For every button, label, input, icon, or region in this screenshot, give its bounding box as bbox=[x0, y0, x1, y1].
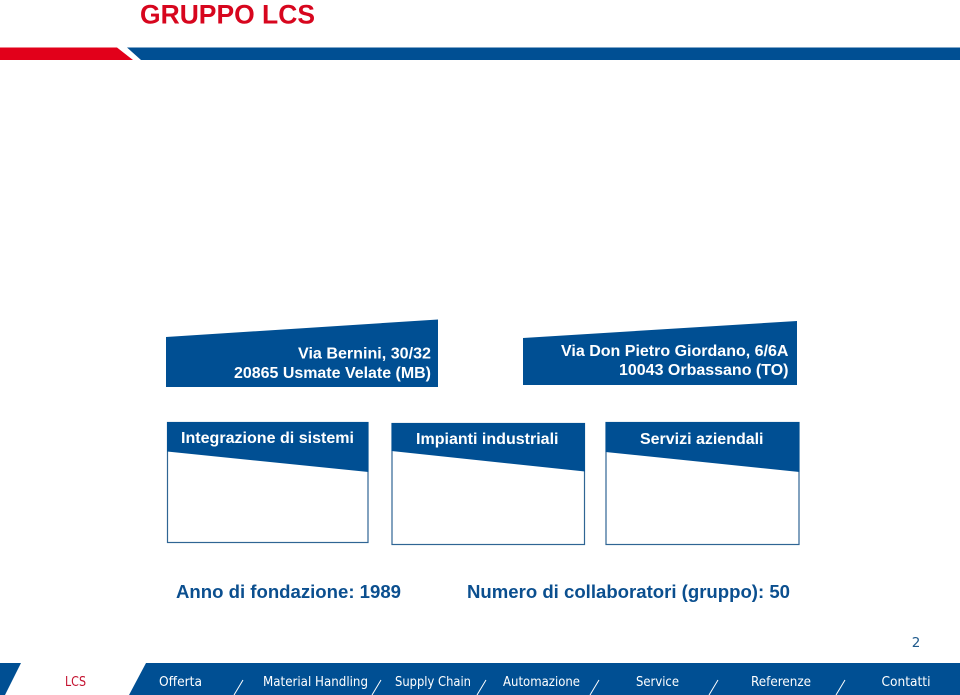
footer navigation: Referenze bbox=[751, 674, 811, 690]
panel: Orbassano address bbox=[523, 321, 797, 385]
panel: Orbassano address: Via Don Pietro Giordano, 6/6A bbox=[561, 343, 789, 360]
footer navigation: Automazione bbox=[503, 674, 580, 690]
panel: Usmate address: 20865 Usmate Velate (MB) bbox=[234, 365, 431, 382]
panel: Orbassano address: 10043 Orbassano (TO) bbox=[619, 362, 788, 379]
footer navigation bbox=[0, 663, 960, 695]
title: GRUPPO LCS bbox=[140, 0, 315, 30]
panel: Integrazione di sistemi bbox=[167, 422, 368, 542]
employee count: Numero di collaboratori (gruppo): 50 bbox=[467, 582, 790, 602]
founding year: Anno di fondazione: 1989 bbox=[176, 582, 401, 602]
panel: Servizi aziendali bbox=[606, 422, 800, 544]
footer navigation: Offerta bbox=[159, 674, 202, 690]
panel: Servizi aziendali: Servizi aziendali bbox=[640, 431, 764, 448]
panel: Usmate address: Via Bernini, 30/32 bbox=[298, 346, 431, 362]
footer navigation: Supply Chain bbox=[395, 674, 471, 690]
panel: Usmate address bbox=[166, 320, 438, 387]
footer navigation: Service bbox=[636, 674, 679, 690]
panel: Integrazione di sistemi: Integrazione di sistemi bbox=[181, 430, 354, 447]
panel: Impianti industriali bbox=[392, 423, 585, 544]
footer navigation: Contatti bbox=[882, 674, 930, 690]
footer navigation: LCS bbox=[65, 674, 86, 690]
footer navigation: Material Handling bbox=[263, 674, 368, 690]
header bar bbox=[0, 48, 960, 60]
panel: Impianti industriali: Impianti industriali bbox=[416, 431, 558, 448]
page number: 2 bbox=[912, 635, 920, 651]
